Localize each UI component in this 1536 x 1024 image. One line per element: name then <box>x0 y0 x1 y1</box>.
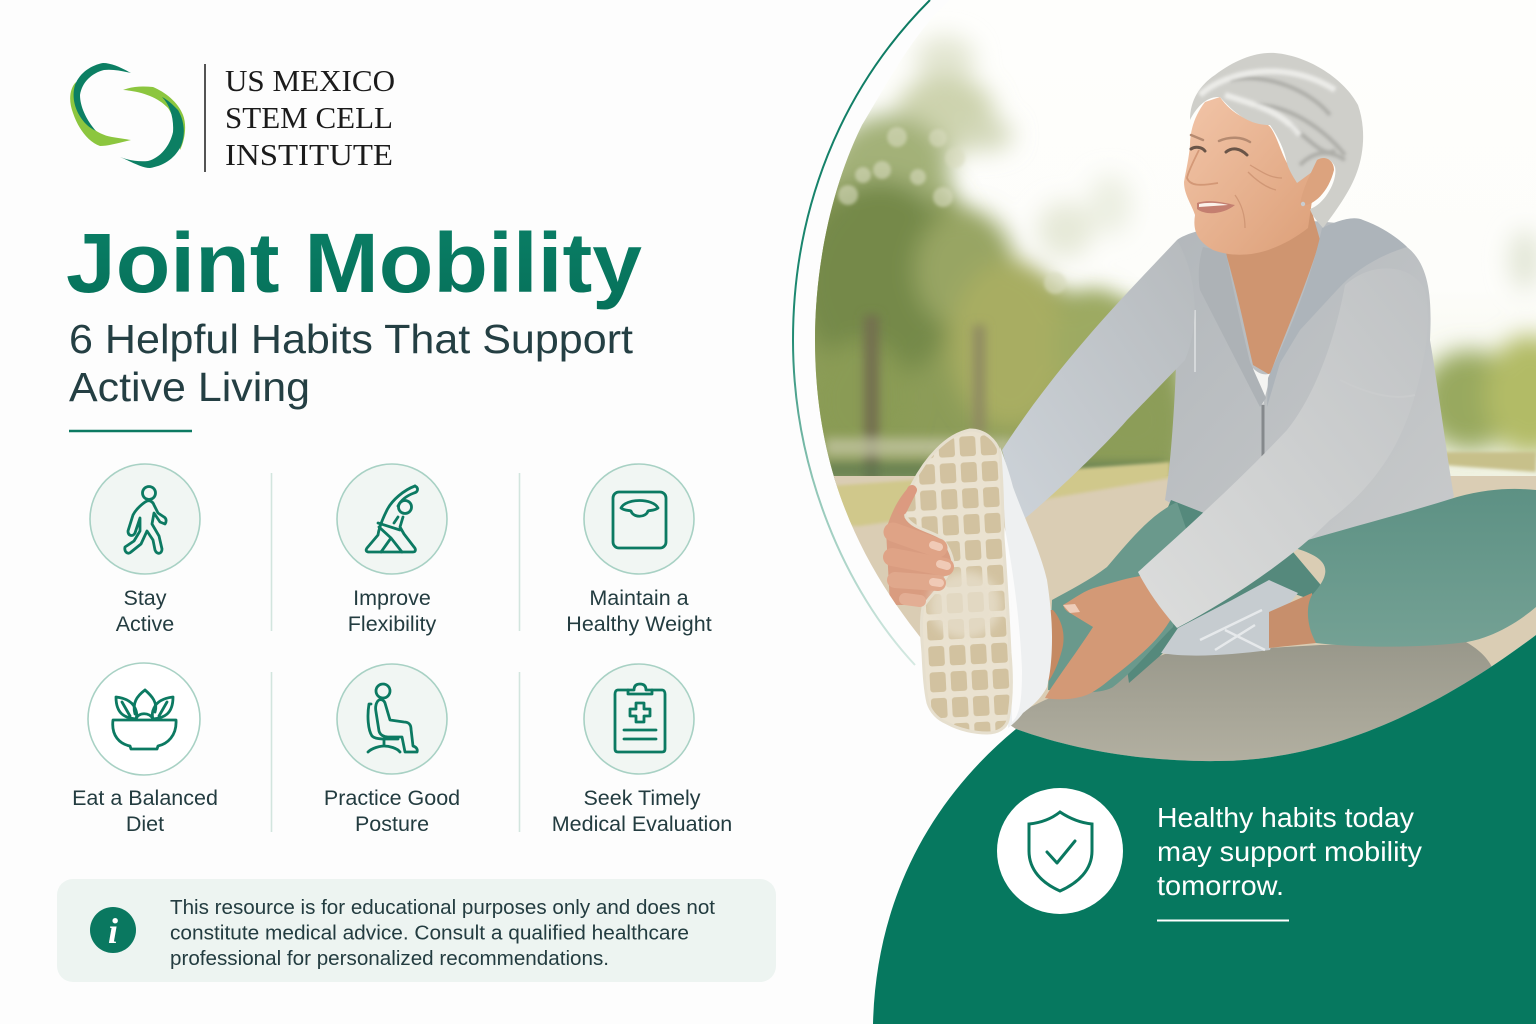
hand behind sole <box>886 490 951 605</box>
bokeh highlights <box>838 127 1066 294</box>
woman <box>1002 53 1536 699</box>
habit: seek timely medical evaluation <box>552 664 732 836</box>
logo wordmark: US MEXICO <box>225 63 395 98</box>
icon: logo rings <box>70 63 185 168</box>
habit: practice good posture <box>324 664 460 836</box>
blurred trees <box>800 36 1536 465</box>
eyebrows <box>1191 135 1250 142</box>
far lower leg and shoe <box>1161 580 1316 656</box>
callout text: may support mobility <box>1157 836 1422 867</box>
label: good posture: Practice Good <box>324 786 460 810</box>
shoe upper <box>1000 447 1052 728</box>
logo divider <box>204 64 206 172</box>
head <box>1184 53 1363 255</box>
subtitle: 6 Helpful Habits That Support <box>69 316 633 362</box>
neck and chest <box>1225 205 1320 375</box>
label: balanced diet: Diet <box>126 812 164 836</box>
green callout panel <box>873 635 1536 1024</box>
label: good posture: Posture <box>355 812 429 836</box>
label: medical evaluation: Seek Timely <box>583 786 701 810</box>
title: Joint Mobility <box>66 216 642 310</box>
hair <box>1190 53 1363 228</box>
icon: walking person <box>125 486 166 553</box>
mouth <box>1197 201 1235 213</box>
logo <box>70 63 395 172</box>
ankle skin <box>1048 610 1064 682</box>
icon: shield badge <box>997 788 1123 914</box>
label: improve flexibility: Improve <box>353 586 431 610</box>
ground and road <box>800 452 1536 776</box>
big thigh <box>1288 489 1536 647</box>
hoodie torso <box>1165 221 1454 546</box>
icon: bowl with leaves <box>113 690 176 749</box>
fingers <box>892 490 947 601</box>
habit: eat a balanced diet <box>72 663 218 836</box>
label: healthy weight: Healthy Weight <box>566 612 712 636</box>
nose shadow <box>1187 150 1218 185</box>
habit: maintain a healthy weight <box>566 464 712 636</box>
decorative arc outline <box>793 0 930 665</box>
undershirt <box>1253 368 1271 405</box>
disclaimer text: constitute medical advice. Consult a qualified healthcare <box>170 922 689 944</box>
photo: woman stretching outdoors <box>815 26 1536 762</box>
disclaimer text: professional for personalized recommendations. <box>170 948 609 970</box>
grip arm sleeve <box>1138 280 1368 628</box>
icon: info <box>90 907 136 953</box>
label: stay active: Stay <box>123 586 167 610</box>
subtitle: Active Living <box>69 364 310 410</box>
icon: info: i <box>108 911 118 951</box>
bent leg <box>1048 502 1190 693</box>
label: healthy weight: Maintain a <box>589 586 689 610</box>
tree mass base <box>815 148 1176 494</box>
logo wordmark: STEM CELL <box>225 100 393 135</box>
crotch shadow teal <box>1120 500 1325 683</box>
pale mid tread <box>929 571 1001 639</box>
photo sky <box>1430 328 1536 476</box>
label: balanced diet: Eat a Balanced <box>72 786 218 810</box>
habit: stay active <box>90 464 200 636</box>
habit: improve flexibility <box>337 464 447 636</box>
eyes <box>1191 147 1247 155</box>
shoe sole and hand, overlapping the photo edge <box>886 430 1052 733</box>
disclaimer panel <box>57 879 776 982</box>
logo wordmark: INSTITUTE <box>225 137 393 172</box>
hand on ankle <box>1045 575 1172 699</box>
label: medical evaluation: Medical Evaluation <box>552 812 732 836</box>
icon: side stretch <box>366 486 418 552</box>
pavement <box>1011 642 1492 761</box>
icon: medical clipboard <box>615 684 665 752</box>
hood and zipper <box>1195 218 1407 480</box>
disclaimer text: This resource is for educational purposes only and does not <box>170 897 715 919</box>
hair strands <box>1230 78 1345 165</box>
tree trunks and hedge <box>825 315 1165 485</box>
icon: seated person <box>368 684 417 752</box>
label: stay active: Active <box>116 612 174 636</box>
icon: weight scale <box>613 492 666 548</box>
ear <box>1311 158 1334 203</box>
label: improve flexibility: Flexibility <box>348 612 436 636</box>
callout text: tomorrow. <box>1157 870 1284 901</box>
wrinkles <box>1235 165 1282 228</box>
logo wordmark <box>225 63 395 172</box>
stretching arm <box>1002 240 1195 520</box>
callout text: Healthy habits today <box>1157 802 1414 833</box>
outsole <box>905 430 1011 733</box>
